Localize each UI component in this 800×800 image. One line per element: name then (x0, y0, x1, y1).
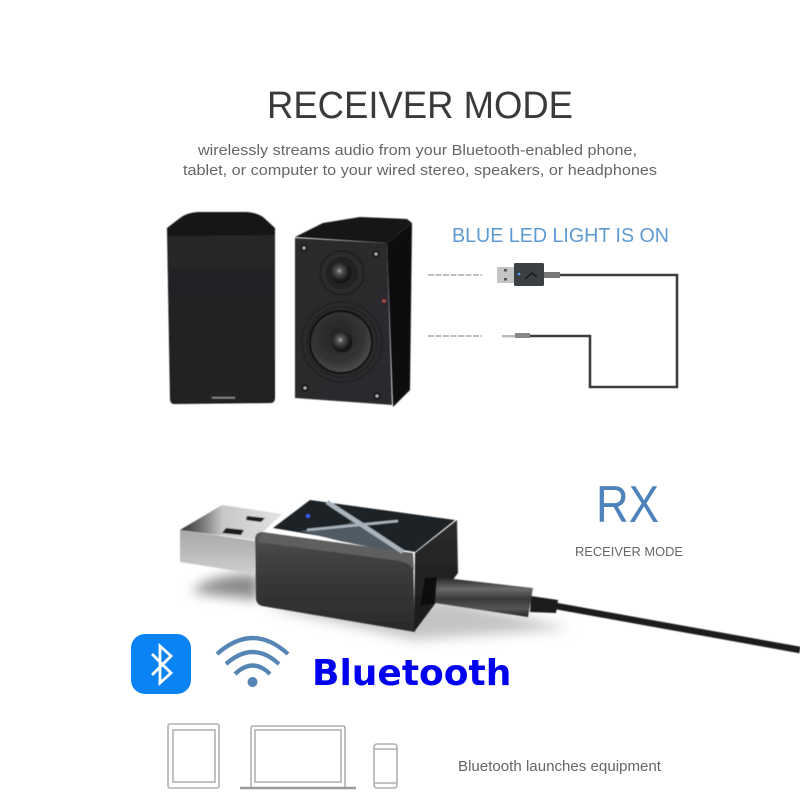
audio plug (502, 333, 530, 338)
icon: wifi (217, 638, 288, 687)
heading: blue LED: BLUE LED LIGHT IS ON (452, 225, 669, 247)
left speaker with grille (167, 212, 275, 404)
description text: wirelessly streams audio from your Bluetooth-enabled phone, (197, 142, 637, 159)
large usb dongle photo (180, 500, 800, 650)
devices caption: Bluetooth launches equipment (458, 759, 661, 775)
dongle shadow (192, 574, 570, 640)
audio jack and cable (420, 577, 800, 650)
RX caption: RECEIVER MODE (575, 545, 683, 559)
woofer (302, 302, 382, 382)
blue LED dot (306, 514, 310, 518)
dongle body (255, 500, 458, 632)
cable diagram (497, 263, 677, 387)
icon: bluetooth (131, 634, 191, 694)
icon: tablet (168, 724, 219, 788)
icon: laptop (240, 726, 356, 788)
usb plug (180, 505, 282, 574)
icon: phone (374, 744, 397, 788)
RX label: RX (596, 476, 659, 534)
tweeter (320, 251, 364, 295)
description text: tablet, or computer to your wired stereo, speakers, or headphones (183, 162, 657, 179)
device icons (168, 724, 397, 788)
description text (183, 142, 657, 179)
right speaker with drivers (295, 217, 412, 407)
title: RECEIVER MODE (267, 85, 573, 127)
bluetooth label: Bluetooth (312, 653, 511, 694)
small usb adapter (497, 263, 560, 286)
connection dashes (428, 275, 482, 336)
